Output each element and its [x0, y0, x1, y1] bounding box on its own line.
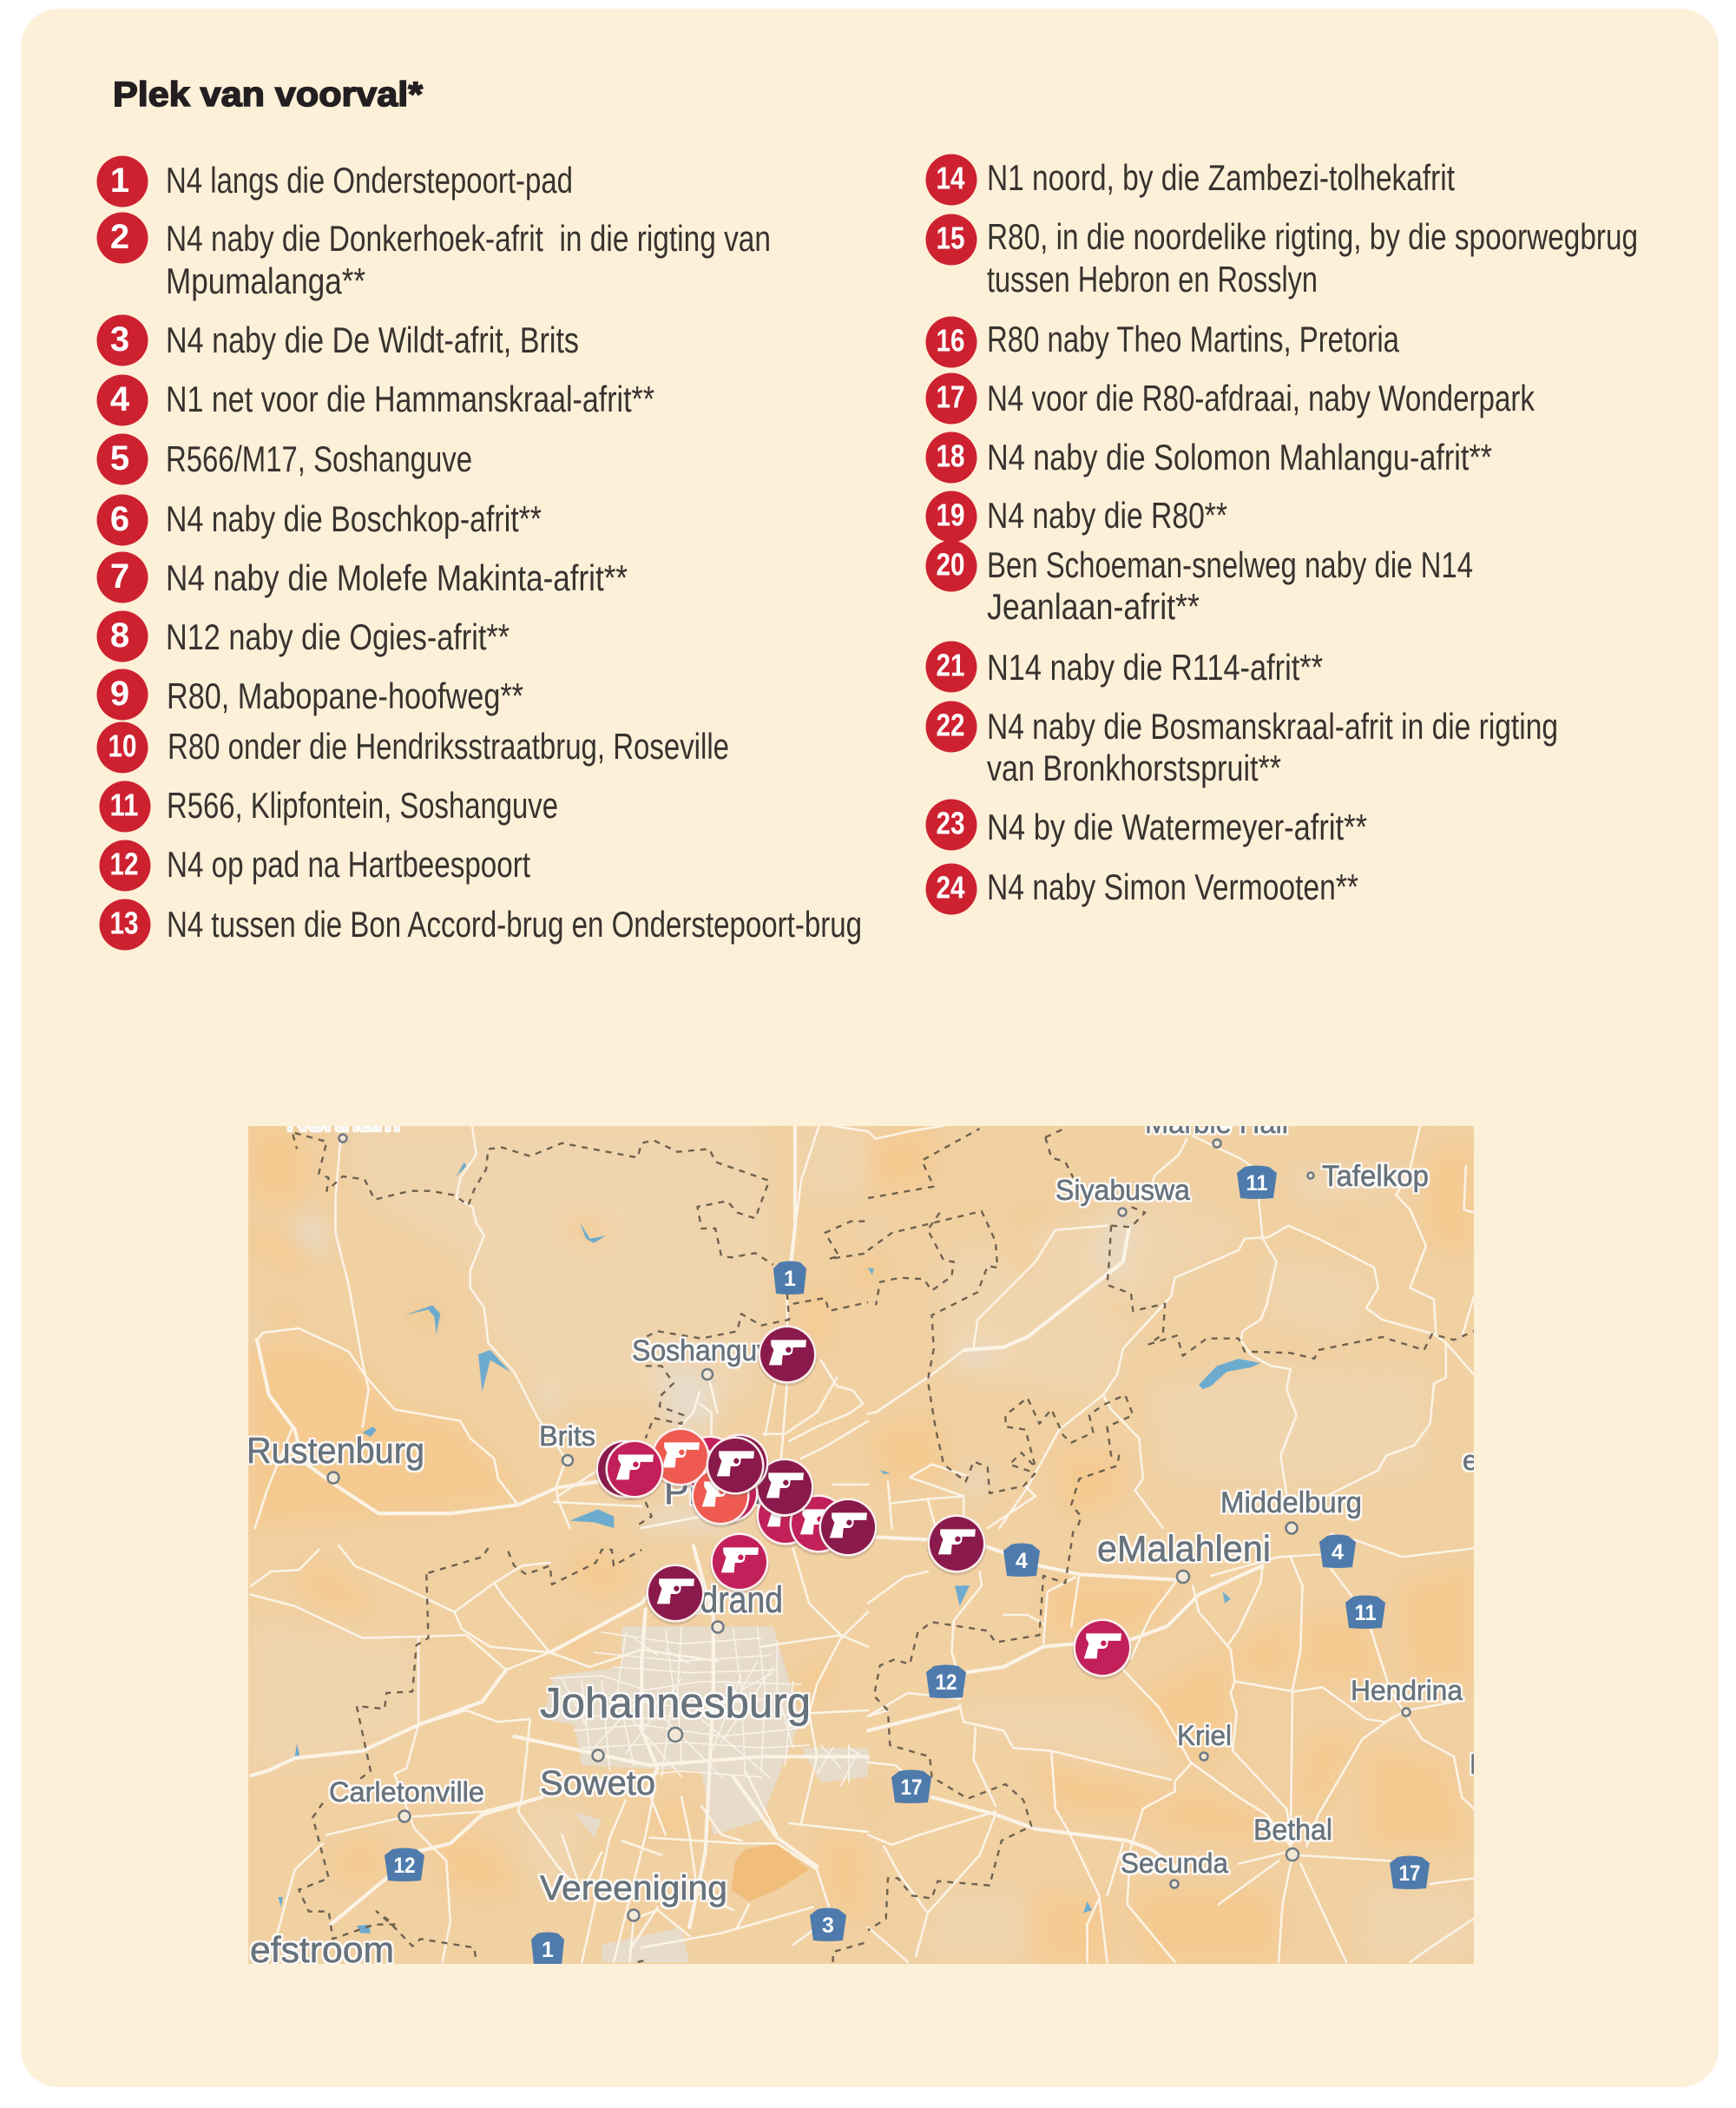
item 5	[97, 434, 472, 484]
map: highway shields	[385, 1165, 1430, 1966]
item 16: R80 naby Theo Martins, Pretoria	[987, 319, 1399, 359]
map: place name labels: Tafelkop	[1322, 1160, 1429, 1193]
map: place name labels: Secunda	[1121, 1848, 1228, 1879]
item 4: N1 net voor die Hammanskraal-afrit**	[166, 379, 654, 419]
item 18: 18	[936, 438, 965, 474]
item 20: Jeanlaan-afrit**	[987, 586, 1200, 627]
item 13: 13	[109, 905, 139, 941]
shield N12 west	[385, 1848, 424, 1881]
shield N12 west: 12	[394, 1854, 415, 1878]
item 6	[97, 495, 542, 545]
shield N4 east: 4	[1332, 1540, 1344, 1565]
pin: dark centre back	[710, 1434, 769, 1495]
item 3	[97, 314, 579, 366]
map: place name labels: Brits	[539, 1420, 595, 1452]
item 24	[925, 863, 1358, 915]
map: place name labels: E	[1470, 1749, 1488, 1780]
shield N17	[891, 1769, 931, 1803]
item 11: R566, Klipfontein, Soshanguve	[167, 785, 558, 826]
map: place name labels: Hendrina	[1351, 1675, 1463, 1706]
pin: dark Bronkhorstspruit	[927, 1514, 986, 1575]
item 5: R566/M17, Soshanguve	[166, 438, 472, 479]
shield N1 south: 1	[542, 1938, 554, 1962]
item 19: 19	[936, 497, 965, 533]
item 19: N4 naby die R80**	[987, 495, 1227, 536]
item 12: N4 op pad na Hartbeespoort	[167, 844, 530, 885]
map: Johannesburg urban area and Sasolburg orange patch	[542, 1626, 868, 1962]
map: place name labels: Kriel	[1177, 1720, 1232, 1751]
pin: dark centre	[705, 1436, 766, 1497]
pin: crimson behind centre	[681, 1436, 740, 1497]
shield N11 south: 11	[1354, 1601, 1377, 1625]
item 14	[925, 155, 1455, 205]
item 24: N4 naby Simon Vermooten**	[987, 866, 1358, 907]
item 22: N4 naby die Bosmanskraal-afrit in die rigting	[987, 706, 1558, 747]
item 8: N12 naby die Ogies-afrit**	[166, 616, 510, 657]
map: incident gun pins	[595, 1325, 1132, 1679]
map: place name labels: Vereeniging	[540, 1869, 727, 1907]
item 22: van Bronkhorstspruit**	[987, 748, 1281, 788]
item 12	[99, 840, 530, 891]
item 24: 24	[936, 870, 965, 905]
shield N11 south	[1345, 1596, 1385, 1629]
item 23: N4 by die Watermeyer-afrit**	[987, 807, 1367, 847]
item 19	[925, 491, 1227, 542]
item 21: 21	[936, 648, 965, 682]
item 14: N1 noord, by die Zambezi-tolhekafrit	[987, 157, 1455, 198]
pin: dark far east	[818, 1499, 878, 1559]
map: place name labels: Soshanguve	[632, 1334, 786, 1367]
shield N3: 3	[822, 1914, 834, 1938]
map: place name labels	[247, 1104, 1488, 1970]
map: place name labels: Johannesburg	[540, 1680, 811, 1727]
map: Gauteng and surroundings	[247, 1104, 1488, 1970]
item 6: 6	[110, 500, 129, 538]
item 20	[925, 540, 1473, 627]
pin: coral north	[651, 1427, 710, 1488]
item 11: 11	[109, 787, 139, 823]
pin: crimson centre	[700, 1464, 759, 1525]
item 17: N4 voor die R80-afdraai, naby Wonderpark	[987, 378, 1535, 418]
shield N4	[1003, 1544, 1040, 1577]
item 8: 8	[110, 616, 129, 655]
item 22: 22	[936, 707, 965, 743]
item 9: 9	[110, 675, 129, 713]
map: place name labels: Carletonville	[329, 1776, 484, 1808]
pin: crimson Ogies	[1073, 1618, 1132, 1679]
item 4	[97, 375, 654, 425]
map: place name labels: Middelburg	[1220, 1486, 1362, 1519]
item 20: 20	[936, 547, 965, 582]
pin: dark west	[595, 1439, 654, 1500]
map: dashed provincial borders	[293, 1127, 1474, 1962]
item 8	[97, 611, 510, 662]
pin: dark east	[755, 1459, 814, 1519]
item 22	[925, 702, 1558, 788]
item 7: N4 naby die Molefe Makinta-afrit**	[166, 557, 628, 598]
item 15: 15	[936, 221, 965, 255]
item 16: 16	[936, 323, 965, 358]
item 10	[97, 722, 729, 773]
list: right column locations 14-24	[925, 155, 1638, 915]
map: road network	[251, 1126, 1474, 1962]
item 20: Ben Schoeman-snelweg naby die N14	[987, 544, 1473, 585]
pin: crimson west	[604, 1439, 665, 1500]
item 16	[925, 316, 1399, 368]
item 18	[925, 432, 1492, 483]
heading: Plek van voorval: Plek van voorval*	[113, 76, 423, 114]
map: place name labels: Midrand	[666, 1579, 783, 1621]
item 5: 5	[110, 439, 129, 478]
map: place name labels: efstroom	[250, 1929, 394, 1970]
map: place name labels: eMalahleni	[1097, 1528, 1271, 1569]
shield N1 south	[531, 1933, 564, 1966]
item 13	[99, 899, 862, 950]
item 18: N4 naby die Solomon Mahlangu-afrit**	[987, 437, 1492, 478]
item 1: 1	[110, 161, 129, 200]
item 10: 10	[108, 728, 137, 764]
item 17: 17	[936, 379, 965, 415]
map: place name labels: Siyabuswa	[1055, 1174, 1191, 1206]
item 15	[925, 214, 1638, 300]
shield N11: 11	[1246, 1171, 1268, 1196]
item 2: N4 naby die Donkerhoek-afrit in die rigting van	[166, 218, 771, 259]
map: place name labels: Rustenburg	[247, 1430, 424, 1471]
shield N1: 1	[784, 1267, 796, 1291]
item 21	[925, 641, 1323, 693]
item 7	[97, 552, 628, 603]
item 11	[99, 781, 558, 832]
item 10: R80 onder die Hendriksstraatbrug, Roseville	[168, 726, 729, 767]
item 2	[97, 212, 771, 301]
item 12: 12	[109, 846, 139, 882]
item 2: 2	[110, 218, 129, 256]
item 9: R80, Mabopane-hoofweg**	[167, 675, 523, 716]
item 21: N14 naby die R114-afrit**	[987, 647, 1323, 688]
item 7: 7	[110, 557, 129, 596]
pin: dark Midrand	[646, 1565, 705, 1625]
shield N11	[1237, 1165, 1277, 1199]
item 3: 3	[110, 320, 129, 359]
shield N17 east	[1390, 1856, 1430, 1889]
shield N4: 4	[1016, 1549, 1028, 1573]
pin: crimson east 1	[755, 1486, 816, 1547]
map: place name labels: Bethal	[1253, 1814, 1332, 1847]
pin: dark Soshanguve	[757, 1325, 818, 1386]
pin: coral centre	[691, 1467, 750, 1528]
map: place name labels: Marble Hall	[1145, 1107, 1288, 1140]
shield N3	[810, 1908, 846, 1941]
item 4: 4	[110, 380, 130, 418]
list: left column locations 1-13	[97, 156, 862, 950]
item 23	[925, 799, 1367, 851]
shield N4 east	[1319, 1535, 1356, 1568]
item 1: N4 langs die Onderstepoort-pad	[166, 160, 573, 201]
map: town location dots	[328, 1134, 1410, 1920]
item 6: N4 naby die Boschkop-afrit**	[166, 498, 542, 539]
item 2: Mpumalanga**	[166, 260, 365, 301]
item 14: 14	[936, 160, 965, 196]
item 1	[97, 156, 573, 207]
map: lakes and rivers	[278, 1162, 1260, 1933]
item 13: N4 tussen die Bon Accord-brug en Onderstepoort-brug	[167, 904, 862, 945]
shield N1	[773, 1261, 806, 1294]
item 3: N4 naby die De Wildt-afrit, Brits	[166, 319, 579, 360]
pin: crimson Centurion	[710, 1533, 769, 1594]
item 15: tussen Hebron en Rosslyn	[987, 259, 1318, 300]
item 23: 23	[936, 806, 965, 840]
item 9	[97, 669, 523, 721]
map: place name labels: Northam	[286, 1104, 400, 1137]
map: place name labels: Pretoria	[664, 1471, 795, 1512]
map: place name labels: Soweto	[540, 1764, 655, 1802]
pin: crimson east 2	[788, 1495, 849, 1556]
shield N12 east: 12	[936, 1670, 957, 1695]
shield N12 east	[926, 1665, 966, 1698]
item 17	[925, 373, 1535, 424]
map: place name labels: e	[1463, 1445, 1478, 1476]
shield N17: 17	[901, 1775, 922, 1800]
shield N17 east: 17	[1399, 1861, 1420, 1886]
